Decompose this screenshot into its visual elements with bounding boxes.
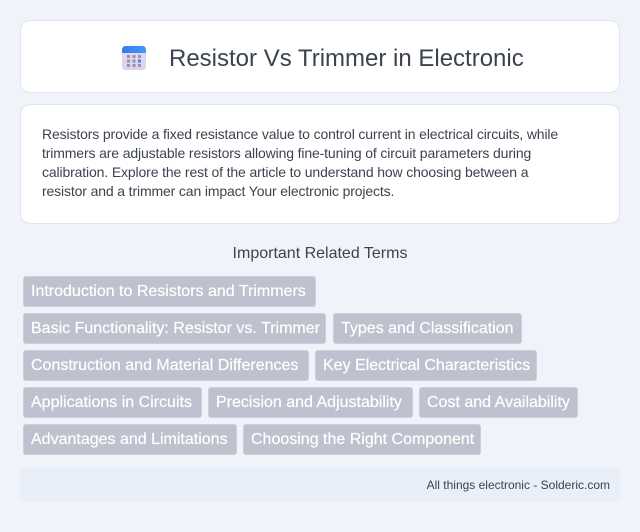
tag [23, 313, 326, 344]
tag: Choosing the Right Component [251, 431, 474, 448]
panel: description [20, 104, 620, 224]
footer [20, 468, 620, 502]
tag: Introduction to Resistors and Trimmers [31, 283, 306, 300]
tag [333, 313, 522, 344]
tag [208, 387, 413, 418]
tag: Advantages and Limitations [31, 431, 228, 448]
tag: Key Electrical Characteristics [323, 357, 530, 374]
icon: calendar [122, 46, 146, 70]
tag [23, 350, 309, 381]
tag: Cost and Availability [427, 394, 570, 411]
description text: Resistors provide a fixed resistance value to control current in electrical circuits, while [42, 126, 558, 142]
tag [315, 350, 537, 381]
tag: Types and Classification [341, 320, 514, 337]
description text [42, 126, 558, 199]
tag [23, 387, 202, 418]
tag: Precision and Adjustability [216, 394, 402, 411]
footer text: All things electronic - Solderic.com [427, 478, 610, 492]
description text: trimmers are adjustable resistors allowing fine-tuning of circuit parameters during [42, 145, 531, 161]
tag [243, 424, 481, 455]
tag: Basic Functionality: Resistor vs. Trimmer [31, 320, 320, 337]
header card [20, 20, 620, 93]
tag: Applications in Circuits [31, 394, 192, 411]
description text: calibration. Explore the rest of the article to understand how choosing between a [42, 164, 528, 180]
description text: resistor and a trimmer can impact Your electronic projects. [42, 183, 394, 199]
tag [419, 387, 578, 418]
title: Resistor Vs Trimmer in Electronic [169, 45, 524, 72]
heading: important related terms: Important Related Terms [233, 245, 407, 262]
tag [23, 276, 316, 307]
tag: Construction and Material Differences [31, 357, 298, 374]
tag list [23, 276, 578, 455]
tag [23, 424, 237, 455]
